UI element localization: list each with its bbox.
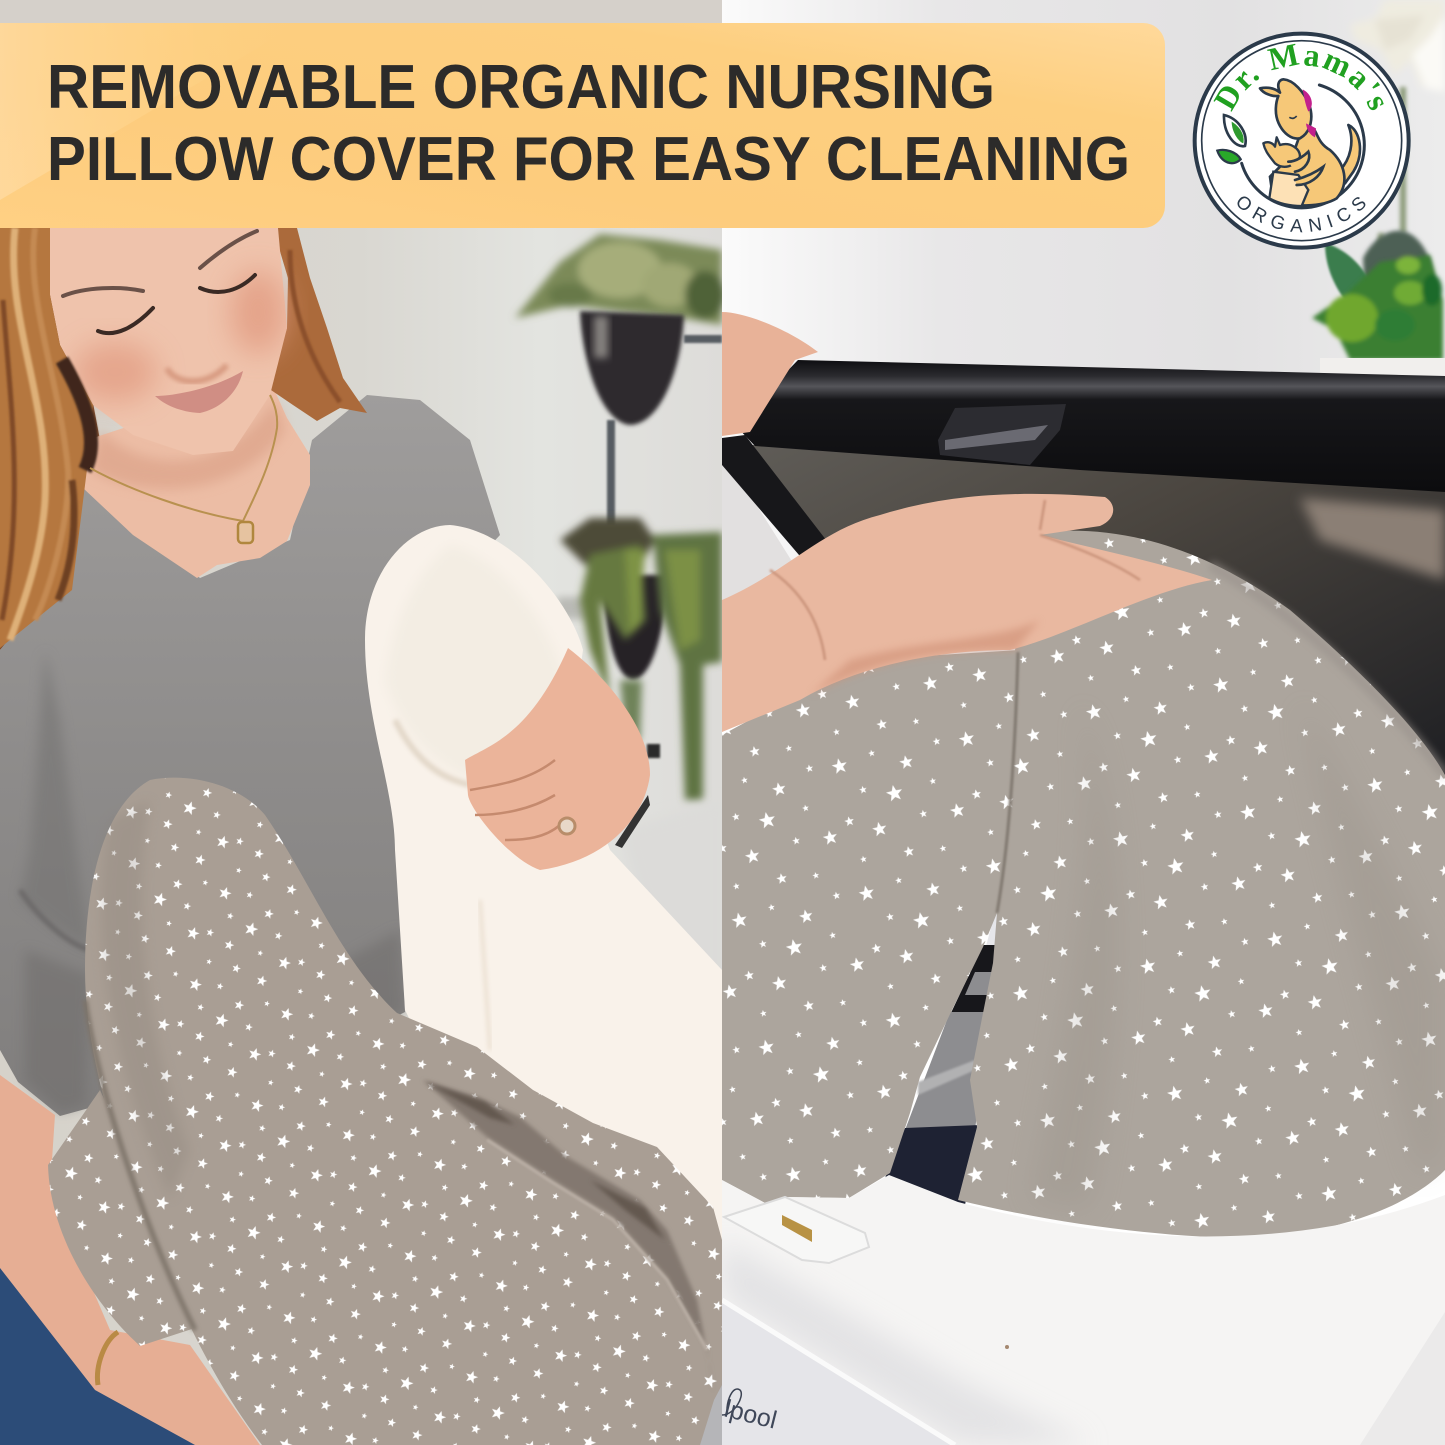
hand holding pillow (465, 648, 650, 870)
washer lid frame (735, 360, 1445, 492)
control label (724, 1197, 869, 1263)
cover left edge shadow (85, 1000, 195, 1330)
side table blur (557, 597, 587, 619)
speck on deck (1005, 1345, 1009, 1349)
nose shadow (167, 365, 227, 381)
watch strap (615, 795, 650, 848)
window reflection (1300, 498, 1445, 580)
grey shirt (0, 395, 500, 1116)
neck and chest (83, 380, 310, 578)
finger lines (470, 760, 560, 840)
washer top deck (722, 1175, 1445, 1445)
mother's eye (1289, 116, 1297, 118)
left photo wall background (0, 228, 722, 1445)
panel: left photo, woman removing pillow cover (0, 0, 725, 1445)
seam highlight (487, 1140, 707, 1350)
kangaroo body (1270, 127, 1344, 205)
chin shadow (90, 400, 285, 489)
mother's headscarf (1303, 89, 1316, 137)
handle highlight (945, 425, 1048, 450)
kangaroo head (1260, 79, 1311, 139)
forearm and hand lifting cover (722, 494, 1212, 732)
hanging pot upper (580, 311, 684, 425)
hand shadow (810, 620, 1040, 695)
woman's face (50, 228, 287, 455)
small gold tag (782, 1215, 812, 1242)
orchid stem (1378, 87, 1406, 300)
large leaf (1224, 115, 1246, 146)
right cheek blush (230, 270, 286, 354)
fold crease between folds (997, 652, 1018, 913)
kangaroo tail (1340, 125, 1360, 183)
hair back layer (0, 295, 100, 650)
ring (559, 818, 575, 834)
green shrub (1312, 255, 1443, 360)
necklace pendant (238, 522, 253, 543)
dark basket (885, 1125, 980, 1205)
lid left frame (722, 435, 830, 562)
washer window (750, 445, 1445, 790)
mother's arm (1288, 152, 1323, 185)
front panel edge highlight (722, 1300, 955, 1445)
logo wreath arc (1242, 85, 1364, 208)
logo: Dr. Mama's Organics badge (1192, 32, 1411, 250)
shirt hem (20, 890, 90, 950)
knuckle lines (770, 500, 1140, 660)
floor area (696, 800, 700, 802)
small black stand base (647, 744, 660, 758)
lower wall behind lid (722, 450, 810, 600)
logo script bottom: ORGANICS (1238, 196, 1366, 232)
joey head (1263, 137, 1300, 167)
shirt lower layer shading (25, 930, 404, 1112)
brand swirl (722, 1389, 741, 1415)
interior light stripe (918, 1060, 975, 1095)
pillow fold shadow (395, 720, 470, 785)
banner background (0, 23, 1165, 228)
pillow head shading (385, 545, 570, 780)
orchid flowers (1350, 0, 1445, 93)
white pillow insert (365, 525, 722, 1240)
pot highlight (594, 316, 608, 358)
plant stand pole (607, 335, 722, 525)
fold shading right (1030, 700, 1445, 1210)
logo inner ring (1202, 41, 1402, 241)
orchid leaf left (1325, 243, 1373, 300)
cover inner opening shadow (423, 1080, 713, 1393)
opening deep shadow (425, 1082, 665, 1240)
left fold of cover (722, 650, 1018, 1203)
panel: right photo, cover going into washing machine (722, 0, 1445, 1445)
forearm bottom left (0, 1075, 260, 1445)
top ribbon of cover (1210, 565, 1445, 775)
top wall strip (374, 0, 722, 23)
hanging pot lower (603, 575, 667, 680)
bottom right corner backdrop (700, 1385, 722, 1445)
left cheek blush (73, 342, 157, 402)
logo script top: Dr. Mama's (1214, 44, 1384, 112)
lid handle (938, 404, 1066, 465)
left hair front (0, 228, 93, 648)
orchid leaf large (1363, 231, 1437, 300)
right photo wall background (722, 0, 1445, 700)
back fabric of cover (48, 1090, 195, 1346)
interior white gap (985, 905, 1000, 950)
shelf (1320, 358, 1445, 376)
jeans (0, 1268, 195, 1445)
hair strands (2, 228, 340, 640)
deck shaded band (722, 1240, 1090, 1445)
banner heading line 2: PILLOW COVER FOR EASY CLEANING (47, 125, 1130, 194)
cover shading (101, 800, 190, 1200)
necklace (90, 395, 277, 521)
interior grey panel (905, 972, 992, 1130)
hanging plant lower (560, 518, 722, 800)
interior black bar (950, 945, 995, 1015)
washer lower right bevel (1360, 1312, 1445, 1445)
washer interior (885, 905, 1000, 1205)
right fold of cover (958, 531, 1445, 1238)
pillow seam (480, 900, 490, 1050)
hand on lid (722, 312, 818, 436)
small leaf (1217, 150, 1241, 163)
banner (0, 23, 1165, 228)
brand text: lpool (722, 1395, 780, 1435)
eyes and brows (63, 231, 257, 333)
washer front panel (722, 1300, 955, 1445)
banner left glow (0, 23, 300, 200)
banner heading line 1: REMOVABLE ORGANIC NURSING (47, 53, 995, 122)
large leaf colour (1232, 122, 1244, 143)
hanging plant upper (515, 234, 725, 325)
right hair lock (268, 228, 367, 421)
star-print pillow cover (85, 778, 722, 1445)
sleeve shading (25, 675, 84, 938)
joey pouch body (1269, 172, 1308, 206)
logo disc (1195, 34, 1409, 248)
brand mark (722, 1389, 780, 1435)
bracelet (97, 1332, 118, 1385)
lips (155, 371, 243, 413)
